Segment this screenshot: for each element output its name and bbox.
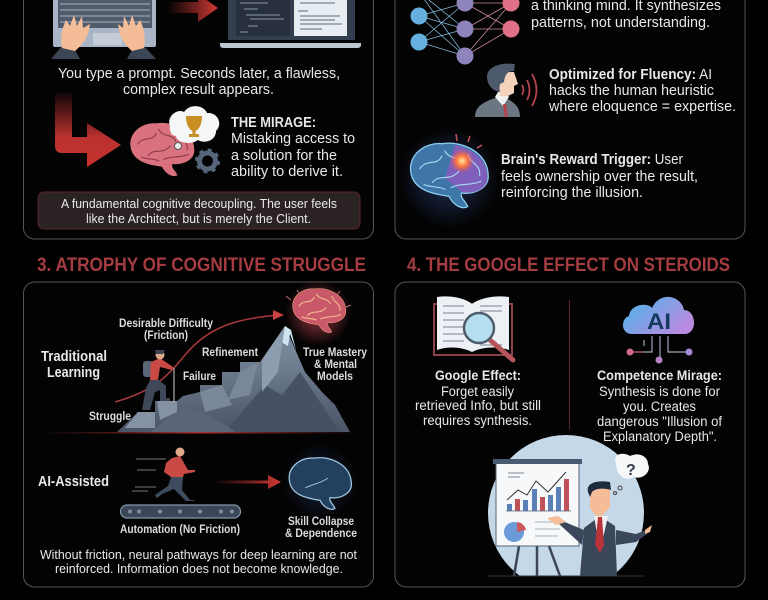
chart line: struggle curve xyxy=(115,315,280,402)
text: competence mirage xyxy=(597,368,722,444)
icon: climber xyxy=(142,350,174,410)
label: traditional learning xyxy=(41,349,107,381)
icon: glowing pink brain xyxy=(285,280,351,346)
arrow: to skill collapse xyxy=(212,475,281,489)
labels: learning stages: Failure xyxy=(183,371,216,383)
text: optimized for fluency: hacks the human heuristic xyxy=(549,83,714,99)
text: the mirage: a solution for the xyxy=(231,148,337,164)
text: prompt description: You type a prompt. Seconds later, a flawless, xyxy=(58,66,340,82)
callout: cognitive decoupling xyxy=(38,192,360,229)
icon: presenter at chart board: ? xyxy=(626,462,636,479)
text: brain's reward trigger xyxy=(501,152,698,201)
text: google effect xyxy=(415,368,541,428)
callout: cognitive decoupling: like the Architect, but is merely the Client. xyxy=(86,212,311,226)
text: optimized for fluency: where eloquence = expertise. xyxy=(548,99,736,115)
icon: laptop with code and document xyxy=(220,0,361,48)
text: google effect: retrieved Info, but still xyxy=(415,398,541,413)
label: AI-assisted: AI-Assisted xyxy=(38,474,109,490)
panel: atrophy of cognitive struggle xyxy=(24,280,374,587)
text: optimized for fluency xyxy=(548,67,736,115)
label: skill collapse xyxy=(285,516,357,540)
label: skill collapse: Skill Collapse xyxy=(288,516,354,528)
text: competence mirage: you. Creates xyxy=(623,399,696,414)
text: prompt description xyxy=(58,66,340,98)
text: brain's reward trigger: feels ownership over the result, xyxy=(501,169,698,185)
arrow: down and right xyxy=(55,92,121,167)
labels: learning stages: Desirable Difficulty xyxy=(119,318,214,330)
icon: AI cloud xyxy=(623,297,694,364)
text: optimized for fluency: Optimized for Fluency: AI xyxy=(549,67,712,83)
text: the mirage: Mistaking access to xyxy=(231,131,355,147)
callout: cognitive decoupling: A fundamental cognitive decoupling. The user feels xyxy=(61,197,337,211)
labels: learning stages: Models xyxy=(317,371,353,383)
icon: pink brain with trophy cloud and gear xyxy=(130,106,219,176)
label: traditional learning: Learning xyxy=(47,365,100,381)
icon: speaking person xyxy=(475,64,536,117)
divider xyxy=(568,300,570,430)
text: competence mirage: Synthesis is done for xyxy=(599,384,720,399)
arrowhead: to mastery xyxy=(273,310,284,320)
labels: learning stages: (Friction) xyxy=(144,330,188,342)
text: conclusion: Without friction, neural pathways for deep learning are not xyxy=(40,547,357,562)
icon: open book with magnifier xyxy=(434,296,513,360)
text: prompt description: complex result appears. xyxy=(123,82,274,98)
ground line xyxy=(40,432,360,434)
text: brain's reward trigger: Brain's Reward Trigger: User xyxy=(501,152,683,168)
label: traditional learning: Traditional xyxy=(41,349,107,365)
text: google effect: requires synthesis. xyxy=(423,413,532,428)
label: automation: Automation (No Friction) xyxy=(120,524,240,536)
heading: section 3: 3. ATROPHY OF COGNITIVE STRUGGLE xyxy=(37,255,366,276)
text: thinking mind: patterns, not understanding. xyxy=(531,15,710,31)
text: competence mirage: Explanatory Depth". xyxy=(603,429,717,444)
panel: top right xyxy=(395,0,745,239)
labels: learning stages: Struggle xyxy=(89,411,131,423)
panel: top left xyxy=(24,0,374,239)
labels: learning stages: & Mental xyxy=(314,359,357,371)
labels: learning stages: True Mastery xyxy=(303,347,368,359)
icon: AI cloud: AI xyxy=(647,309,671,334)
icon: presenter at chart board xyxy=(488,435,652,591)
text: the mirage: THE MIRAGE: xyxy=(231,115,316,131)
icon: faded blue brain xyxy=(282,444,358,520)
labels: learning stages: Refinement xyxy=(202,347,258,359)
icon: neural network xyxy=(410,0,520,64)
text: competence mirage: dangerous "Illusion of xyxy=(597,414,722,429)
arrow: prompt to result xyxy=(167,0,218,22)
icon: mountain with stairs xyxy=(117,326,350,432)
text: the mirage: ability to derive it. xyxy=(231,164,343,180)
icon: conveyor belt xyxy=(120,505,240,518)
heading: section 4: 4. THE GOOGLE EFFECT ON STEROIDS xyxy=(407,255,730,276)
label: skill collapse: & Dependence xyxy=(285,528,357,540)
text: thinking mind xyxy=(531,0,721,31)
text: google effect: Forget easily xyxy=(441,384,514,399)
text: google effect: Google Effect: xyxy=(435,368,521,383)
panel: google effect xyxy=(395,282,745,591)
text: conclusion: reinforced. Information does not become knowledge. xyxy=(55,561,343,576)
text: conclusion xyxy=(40,547,357,576)
text: the mirage xyxy=(231,115,355,180)
text: competence mirage: Competence Mirage: xyxy=(597,368,722,383)
labels: learning stages xyxy=(89,318,368,423)
text: brain's reward trigger: reinforcing the illusion. xyxy=(501,185,643,201)
icon: glowing brain reward trigger xyxy=(399,128,499,228)
icon: laptop keyboard with hands xyxy=(51,0,156,59)
icon: running figure xyxy=(132,448,195,501)
